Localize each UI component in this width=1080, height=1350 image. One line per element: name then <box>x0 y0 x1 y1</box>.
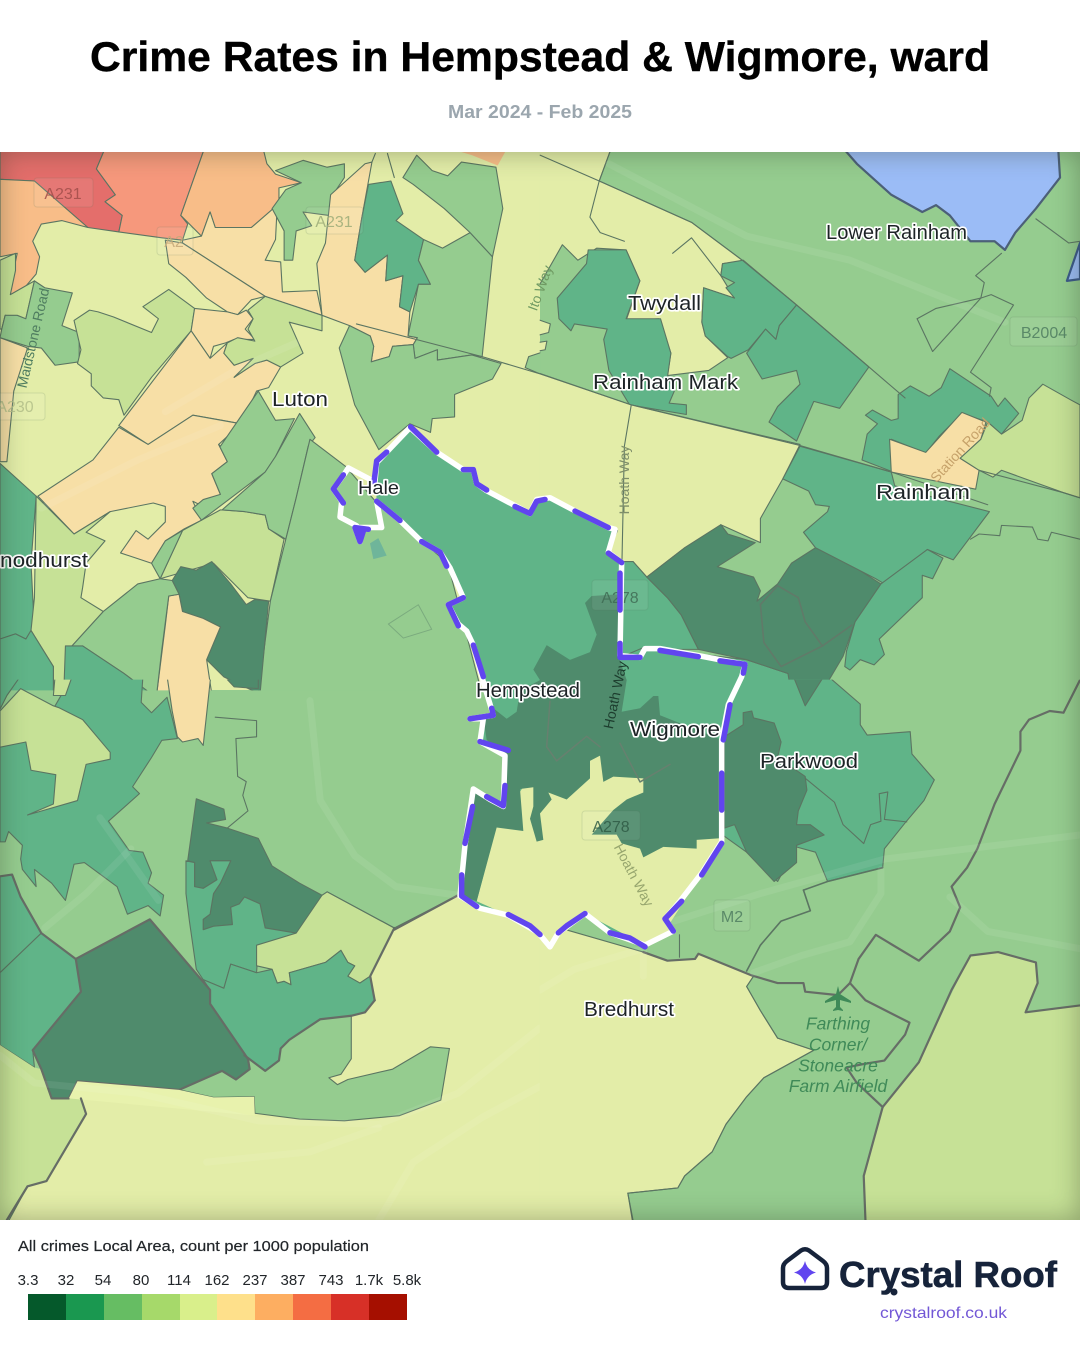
place: Hale: Hale <box>358 478 399 498</box>
road label: B2004: B2004 <box>1021 325 1067 342</box>
brand url: crystalroof.co.uk <box>880 1305 1008 1322</box>
road label: A278 south <box>582 811 640 840</box>
legend title: All crimes Local Area, count per 1000 population <box>18 1238 369 1255</box>
road label: A231 east <box>306 207 363 234</box>
legend <box>18 1238 422 1320</box>
place: Twydall: Twydall <box>628 293 701 315</box>
place: Farthing Corner airfield: Stoneacre <box>798 1056 878 1076</box>
ward fill: Hempstead and Wigmore <box>370 428 745 947</box>
road label: A2 <box>157 227 193 255</box>
choropleth map <box>0 150 1080 1224</box>
map edge vignette <box>0 152 1080 1220</box>
road label: A278 north <box>592 580 648 610</box>
road shields and labels <box>0 178 1077 931</box>
legend scale labels <box>18 1272 422 1289</box>
legend scale labels: 162 <box>204 1272 230 1289</box>
legend scale labels: 3.3 <box>18 1272 38 1289</box>
ward boundary: white and purple dashed line <box>333 427 745 947</box>
road name: Ito Way: Ito Way <box>524 263 556 313</box>
road name: Hoath Way south: Hoath Way <box>611 841 657 909</box>
place: Luton: Luton <box>272 389 328 411</box>
road label: A278 south: A278 <box>592 819 630 836</box>
place: Parkwood: Parkwood <box>760 751 858 773</box>
legend scale labels: 387 <box>280 1272 306 1289</box>
road name: Hoath Way north: Hoath Way <box>616 446 632 514</box>
map area: south-west <box>0 676 544 1224</box>
road name: Maidstone Road: Maidstone Road <box>14 287 52 389</box>
road label: A278 north: A278 <box>601 590 639 607</box>
brand logo <box>783 1249 1058 1322</box>
road label: M2: M2 <box>721 909 743 926</box>
place: Hempstead: Hempstead <box>476 680 580 702</box>
legend colour ramp <box>28 1294 407 1320</box>
road label: M2 <box>714 900 750 931</box>
road label: A231 west <box>34 178 93 207</box>
map area: south-east <box>536 676 1080 1224</box>
road label: A231 west: A231 <box>44 186 82 203</box>
place labels <box>0 222 970 1096</box>
legend scale labels: 5.8k <box>393 1272 422 1289</box>
map area: north-east <box>536 150 1080 694</box>
road label: A2: A2 <box>164 234 184 251</box>
road name: Hoath Way centre: Hoath Way <box>600 660 630 730</box>
subtitle: date range: Mar 2024 - Feb 2025 <box>448 102 632 122</box>
legend scale labels: 1.7k <box>355 1272 384 1289</box>
place: Rainham: Rainham <box>876 482 970 504</box>
legend scale labels: 80 <box>133 1272 149 1289</box>
icon: airfield plane <box>825 986 851 1011</box>
place: Lower Rainham: Lower Rainham <box>826 222 967 244</box>
place: Rainham Mark: Rainham Mark <box>593 372 739 394</box>
legend scale labels: 237 <box>242 1272 268 1289</box>
brand name: Crystal Roof <box>839 1254 1058 1295</box>
legend scale labels: 32 <box>58 1272 74 1289</box>
road label: A230 <box>0 393 45 420</box>
place: Farthing Corner airfield: Farm Airfield <box>789 1076 889 1096</box>
place: Bredhurst: Bredhurst <box>584 999 674 1021</box>
road name: Station Road: Station Road <box>927 415 993 485</box>
place: Wigmore: Wigmore <box>630 719 720 741</box>
icon: house with star <box>783 1249 827 1288</box>
title: Crime Rates in Hempstead & Wigmore, ward <box>90 33 990 80</box>
legend scale labels: 743 <box>318 1272 344 1289</box>
road label: B2004 <box>1010 317 1077 346</box>
place: nodhurst: nodhurst <box>0 550 88 572</box>
icon: key detail on logo letter y <box>890 1288 898 1296</box>
legend scale labels: 114 <box>167 1272 191 1289</box>
road label: A231 east: A231 <box>315 214 353 231</box>
place: Farthing Corner airfield: Corner/ <box>809 1034 869 1054</box>
map area: north-west <box>0 150 544 694</box>
place: Farthing Corner airfield: Farthing <box>806 1014 870 1034</box>
legend scale labels: 54 <box>95 1272 111 1289</box>
